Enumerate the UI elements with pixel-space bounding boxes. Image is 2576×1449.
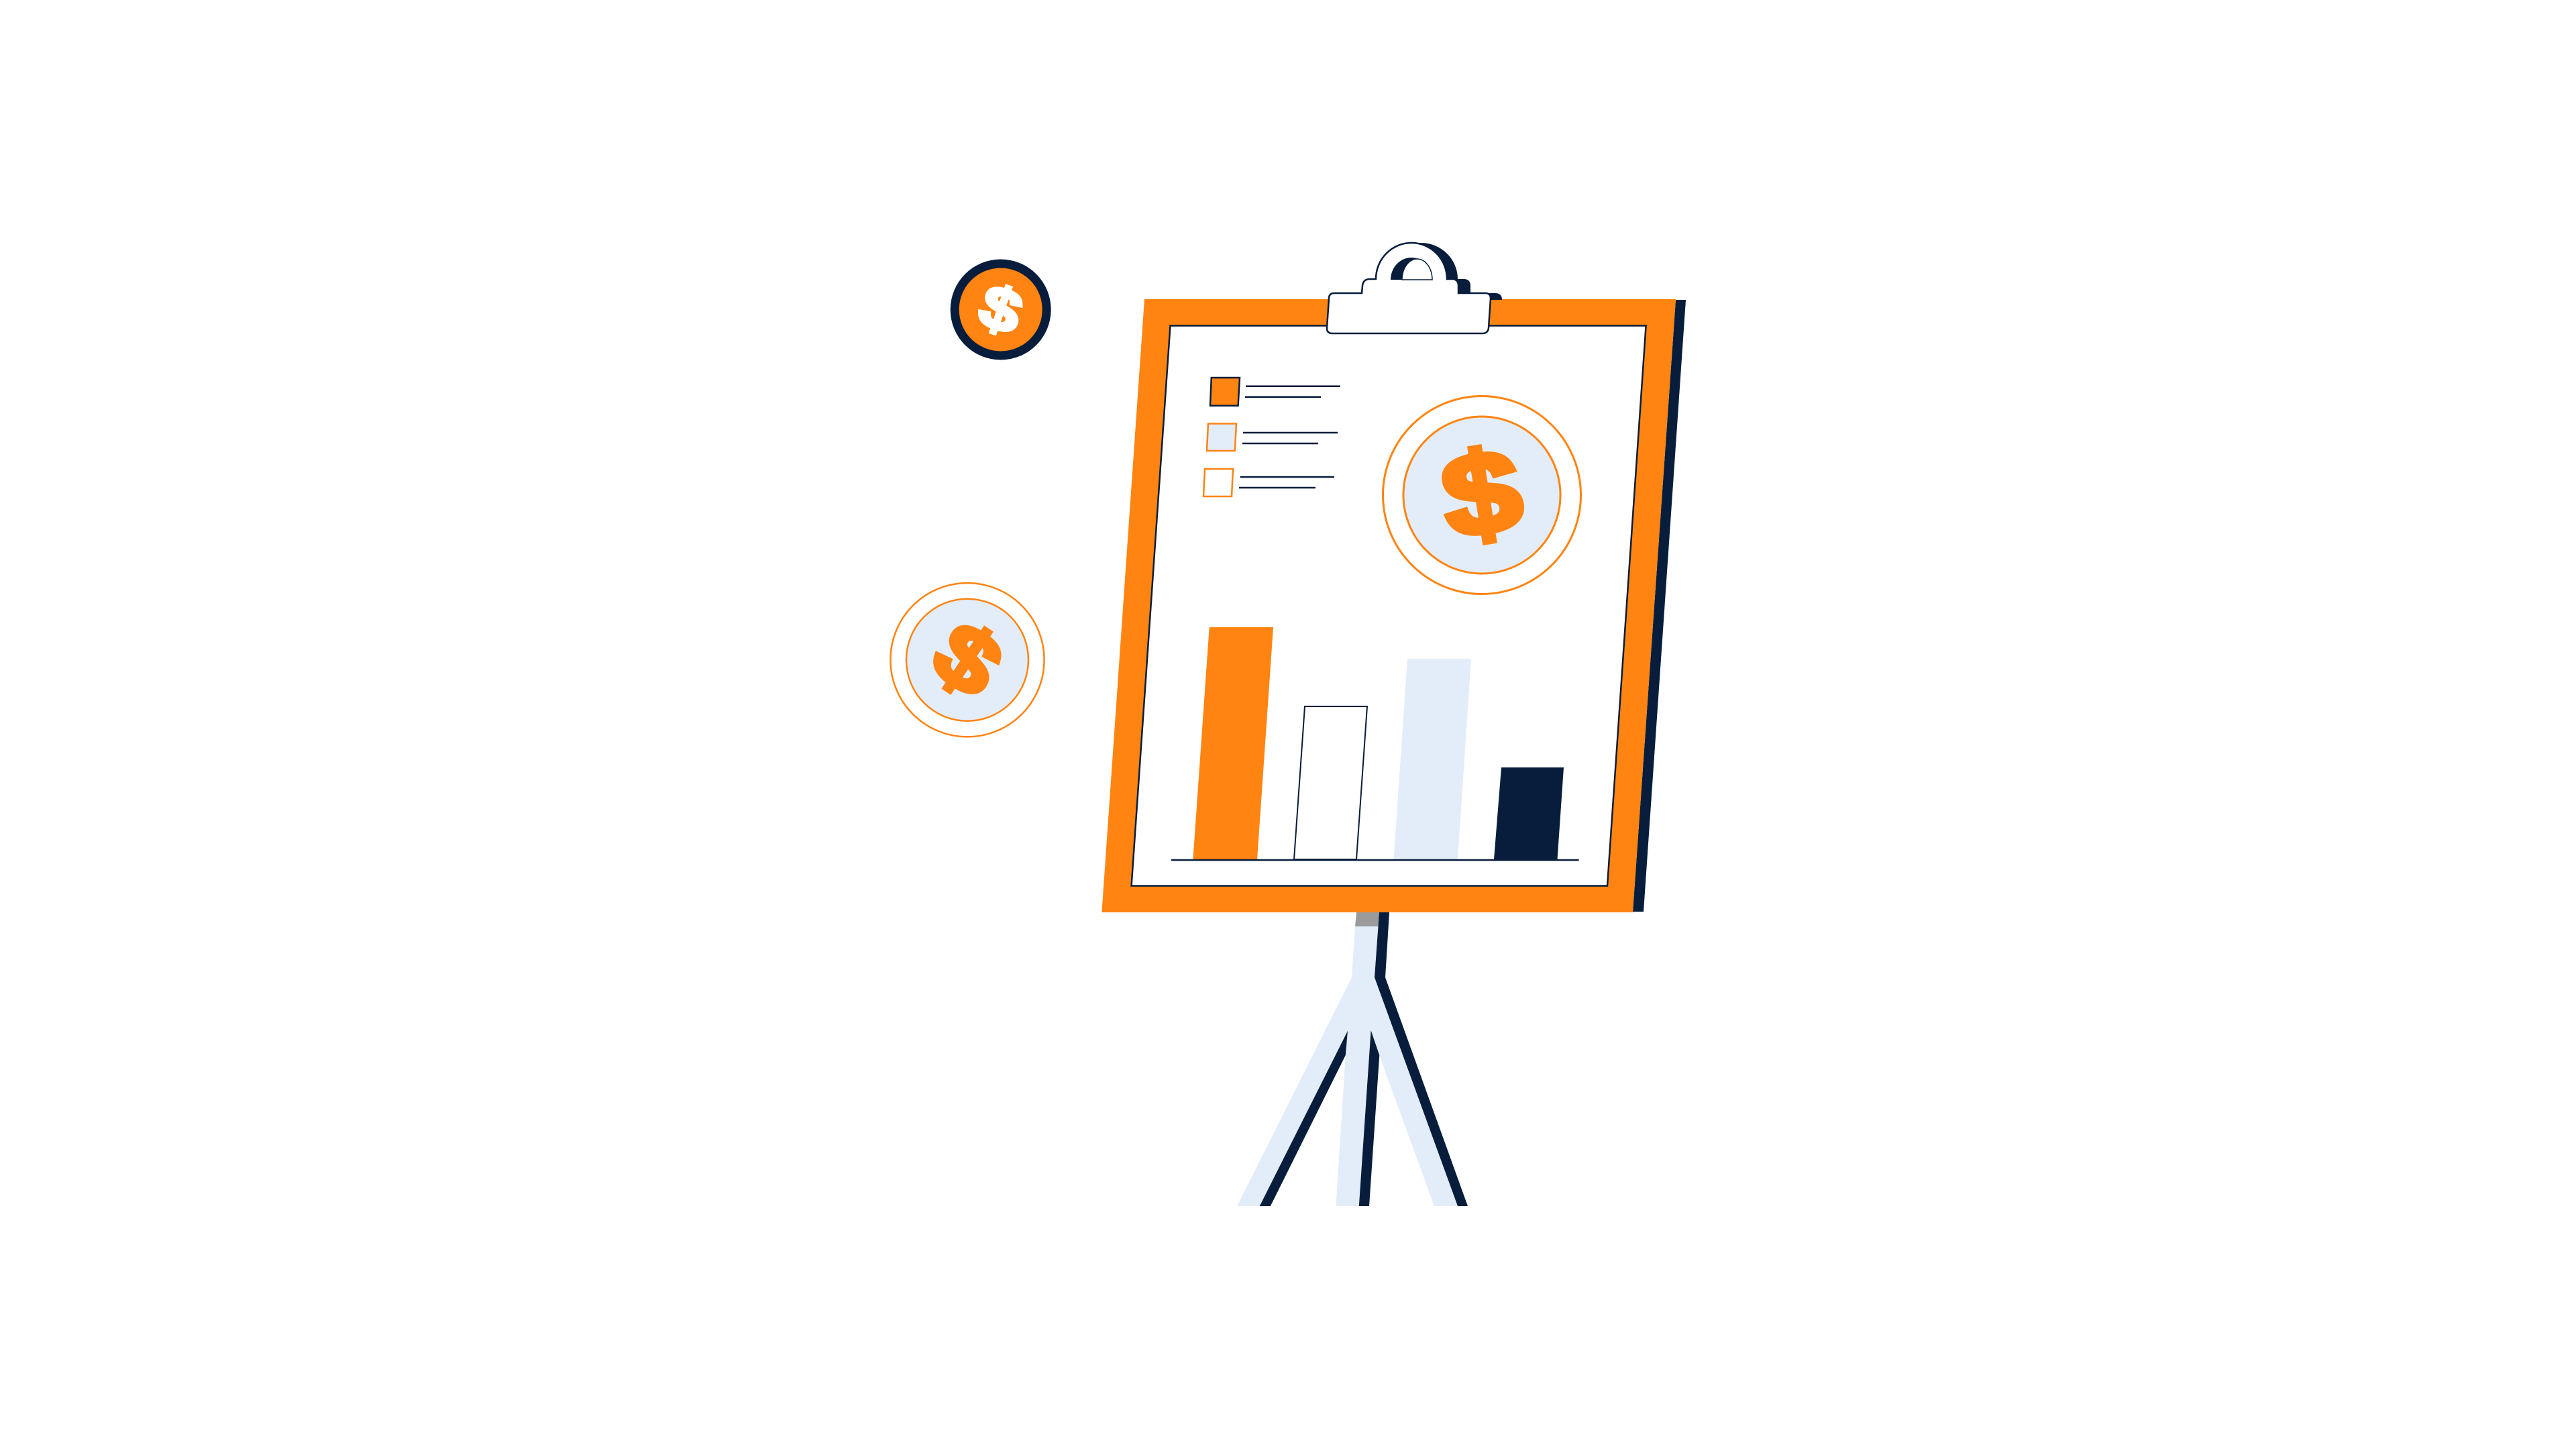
legend item: white <box>1203 469 1334 496</box>
bar chart <box>1171 627 1579 860</box>
bar: outlined white <box>1294 706 1367 859</box>
coin: orange outline <box>890 583 1044 737</box>
coin: navy and orange: $ <box>971 271 1030 347</box>
legend item: orange <box>1210 378 1340 406</box>
coin: orange outline: $ <box>916 602 1020 716</box>
board frame <box>1102 299 1686 912</box>
coin on board <box>1383 396 1580 594</box>
chart baseline <box>1171 859 1579 861</box>
bar: orange <box>1193 627 1273 859</box>
tripod stand <box>1237 912 1468 1206</box>
coin on board: $ <box>1434 424 1529 564</box>
legend item: light blue <box>1207 424 1338 451</box>
bar: light blue <box>1394 659 1471 859</box>
legend <box>1203 378 1340 496</box>
clipboard clip <box>1327 243 1502 333</box>
coin: navy and orange <box>951 259 1051 360</box>
bar: navy <box>1494 767 1564 859</box>
